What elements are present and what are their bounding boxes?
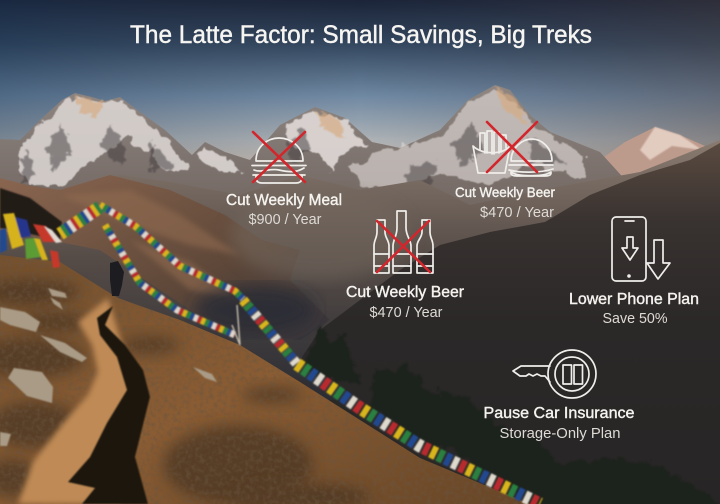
icon: phone with down arrows: [612, 217, 670, 281]
valley haze: [230, 190, 410, 280]
value: $470 / Year: [480, 205, 554, 221]
icon: crossed-out fries and burger: [473, 122, 553, 176]
trail: [18, 298, 146, 504]
brown ridge left: [0, 175, 330, 340]
flags cluster string: [60, 207, 100, 234]
label: Cut Weekly Beer: [346, 284, 464, 301]
middle ridge: [0, 140, 720, 400]
conifers upper left: [0, 188, 62, 240]
value: $470 / Year: [370, 305, 443, 321]
label: Lower Phone Plan: [569, 291, 699, 308]
icon: key with pause symbol: [513, 350, 596, 398]
label: Cut Weekly Beer: [455, 184, 555, 200]
item: lower phone plan: [569, 217, 699, 327]
rock shadows: [20, 122, 568, 193]
sunlit ridges: [75, 87, 528, 140]
icon: crossed-out bottles: [374, 211, 433, 273]
flags left cluster: [0, 213, 62, 268]
flags far strings: [100, 205, 243, 335]
flags near string: [297, 364, 540, 504]
value: Storage-Only Plan: [500, 426, 620, 442]
flags middle string: [243, 300, 297, 364]
icon: crossed-out burger: [252, 132, 306, 183]
foreground hill: [0, 255, 530, 504]
rocks: [0, 288, 217, 446]
distant peak right: [600, 127, 720, 200]
item: pause car insurance: [484, 350, 634, 442]
title: The Latte Factor: Small Savings, Big Treks: [130, 21, 592, 49]
hikers: [110, 261, 124, 296]
hill texture: [0, 250, 540, 504]
tree line: [300, 325, 720, 504]
item: cut weekly meal: [226, 132, 342, 228]
value: Save 50%: [602, 311, 668, 327]
dark ridge right: [300, 143, 720, 504]
value: $900 / Year: [248, 212, 322, 228]
item: cut weekly beer: [346, 211, 464, 321]
trail shadow: [68, 306, 150, 504]
prayer flags: [60, 205, 540, 504]
item: cut weekly takeout: [455, 122, 555, 221]
label: Pause Car Insurance: [484, 405, 634, 422]
mountain range: [0, 85, 630, 300]
snow faces: [17, 90, 585, 195]
label: Cut Weekly Meal: [226, 192, 342, 209]
dry shrubs: [0, 279, 370, 504]
